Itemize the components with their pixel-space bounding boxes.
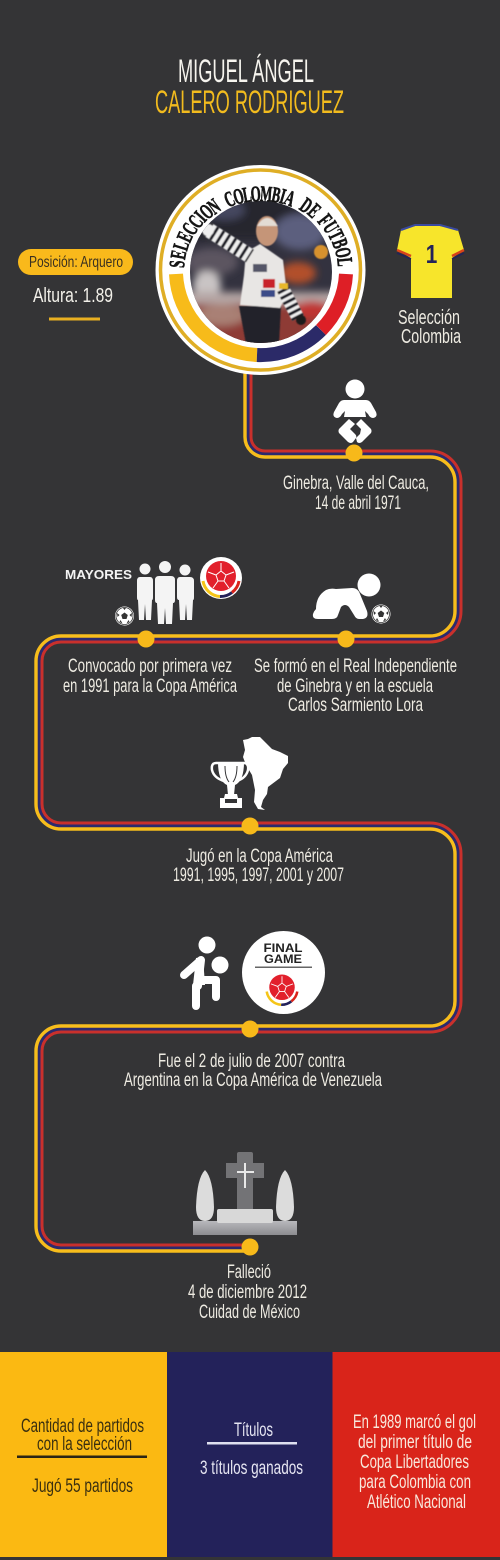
training text: de Ginebra y en la escuela bbox=[277, 676, 433, 697]
emblem lettering: U bbox=[318, 217, 344, 237]
timeline path bbox=[36, 372, 461, 1251]
panel: matches: Cantidad de partidos bbox=[21, 1416, 144, 1437]
jersey caption bbox=[398, 307, 462, 348]
emblem lettering: T bbox=[323, 226, 349, 244]
striped left arm bbox=[207, 229, 250, 256]
title: MIGUEL ÁNGEL bbox=[178, 53, 314, 89]
shorts bbox=[239, 306, 281, 344]
called up text bbox=[63, 656, 237, 697]
emblem with player photo bbox=[156, 165, 366, 375]
called up text: Convocado por primera vez bbox=[68, 656, 232, 677]
death text: Falleció bbox=[227, 1262, 271, 1283]
title bbox=[155, 53, 344, 120]
last match text: Fue el 2 de julio de 2007 contra bbox=[158, 1051, 345, 1072]
icon: player kicking ball bbox=[184, 936, 228, 1006]
birth text: 14 de abril 1971 bbox=[315, 493, 401, 514]
position pill: Posición: Arquero bbox=[29, 254, 123, 271]
emblem lettering: I bbox=[277, 184, 289, 209]
emblem lettering: B bbox=[270, 182, 283, 208]
emblem lettering: E bbox=[303, 199, 326, 223]
final game badge: FINAL bbox=[264, 941, 302, 955]
called up text: en 1991 para la Copa América bbox=[63, 676, 237, 697]
icon: ball bbox=[115, 606, 134, 626]
title: CALERO RODRIGUEZ bbox=[155, 84, 344, 120]
icon: ball bbox=[372, 604, 390, 624]
emblem lettering: E bbox=[172, 228, 198, 246]
panel: matches: Jugó 55 partidos bbox=[32, 1476, 133, 1497]
emblem lettering: D bbox=[295, 193, 317, 218]
final game badge bbox=[242, 931, 325, 1014]
emblem lettering: S bbox=[164, 260, 189, 269]
emblem lettering: C bbox=[220, 186, 239, 212]
copa america text bbox=[173, 846, 344, 886]
death text bbox=[188, 1262, 307, 1323]
copa america text: Jugó en la Copa América bbox=[186, 846, 333, 867]
jersey logo bbox=[263, 279, 275, 288]
height text: Altura: 1.89 bbox=[33, 285, 113, 307]
striped right arm bbox=[283, 289, 298, 318]
panel: matches bbox=[0, 1352, 167, 1557]
icon: baby bbox=[333, 380, 377, 443]
emblem lettering bbox=[164, 181, 358, 269]
emblem lettering: O bbox=[250, 181, 261, 206]
icon: yellow jersey bbox=[397, 225, 464, 298]
training text bbox=[254, 656, 457, 716]
final game badge: GAME bbox=[264, 952, 302, 966]
death text: Cuidad de México bbox=[199, 1302, 300, 1323]
emblem lettering: N bbox=[203, 194, 225, 219]
emblem lettering: E bbox=[166, 248, 191, 261]
panel: titles: 3 títulos ganados bbox=[200, 1458, 303, 1479]
icon: south america map bbox=[243, 737, 288, 810]
panel: matches: con la selección bbox=[37, 1434, 132, 1455]
emblem lettering: F bbox=[313, 209, 337, 231]
jersey bbox=[240, 244, 287, 308]
orange glove shape bbox=[314, 245, 328, 259]
panel: titles bbox=[167, 1352, 332, 1557]
player photo bbox=[190, 201, 332, 343]
panel: libertadores goal bbox=[332, 1352, 500, 1557]
position pill bbox=[18, 249, 133, 275]
icon: grave bbox=[193, 1152, 297, 1235]
emblem lettering: A bbox=[281, 185, 299, 211]
icon: three players bbox=[137, 561, 194, 624]
emblem lettering: B bbox=[327, 236, 353, 251]
birth text: Ginebra, Valle del Cauca, bbox=[283, 473, 429, 494]
birth text bbox=[283, 473, 429, 514]
last match text: Argentina en la Copa América de Venezuela bbox=[124, 1070, 382, 1091]
icon: yellow jersey: 1 bbox=[426, 240, 437, 269]
emblem lettering: O bbox=[194, 199, 218, 224]
emblem colour arcs bbox=[176, 274, 346, 355]
emblem lettering: O bbox=[230, 183, 247, 209]
icon: crawling baby bbox=[313, 574, 380, 619]
emblem lettering: L bbox=[241, 182, 253, 207]
emblem lettering: L bbox=[168, 238, 194, 253]
emblem lettering: L bbox=[332, 257, 358, 267]
mayores label: MAYORES bbox=[65, 568, 132, 582]
head bbox=[256, 216, 278, 246]
copa america text: 1991, 1995, 1997, 2001 y 2007 bbox=[173, 865, 344, 886]
icon: colombia crest bbox=[200, 557, 242, 599]
emblem lettering: I bbox=[190, 206, 211, 226]
icon: trophy bbox=[212, 762, 248, 808]
panel: titles: Títulos bbox=[234, 1420, 273, 1441]
training text: Carlos Sarmiento Lora bbox=[288, 695, 423, 716]
emblem lettering: M bbox=[259, 181, 273, 206]
jersey caption: Colombia bbox=[401, 326, 462, 348]
death text: 4 de diciembre 2012 bbox=[188, 1282, 307, 1303]
emblem lettering: O bbox=[330, 245, 356, 260]
emblem lettering: C bbox=[177, 219, 203, 239]
last match text bbox=[124, 1051, 382, 1091]
emblem lettering: C bbox=[183, 211, 208, 232]
jersey caption: Selección bbox=[398, 307, 460, 329]
timeline dots bbox=[138, 444, 362, 1256]
